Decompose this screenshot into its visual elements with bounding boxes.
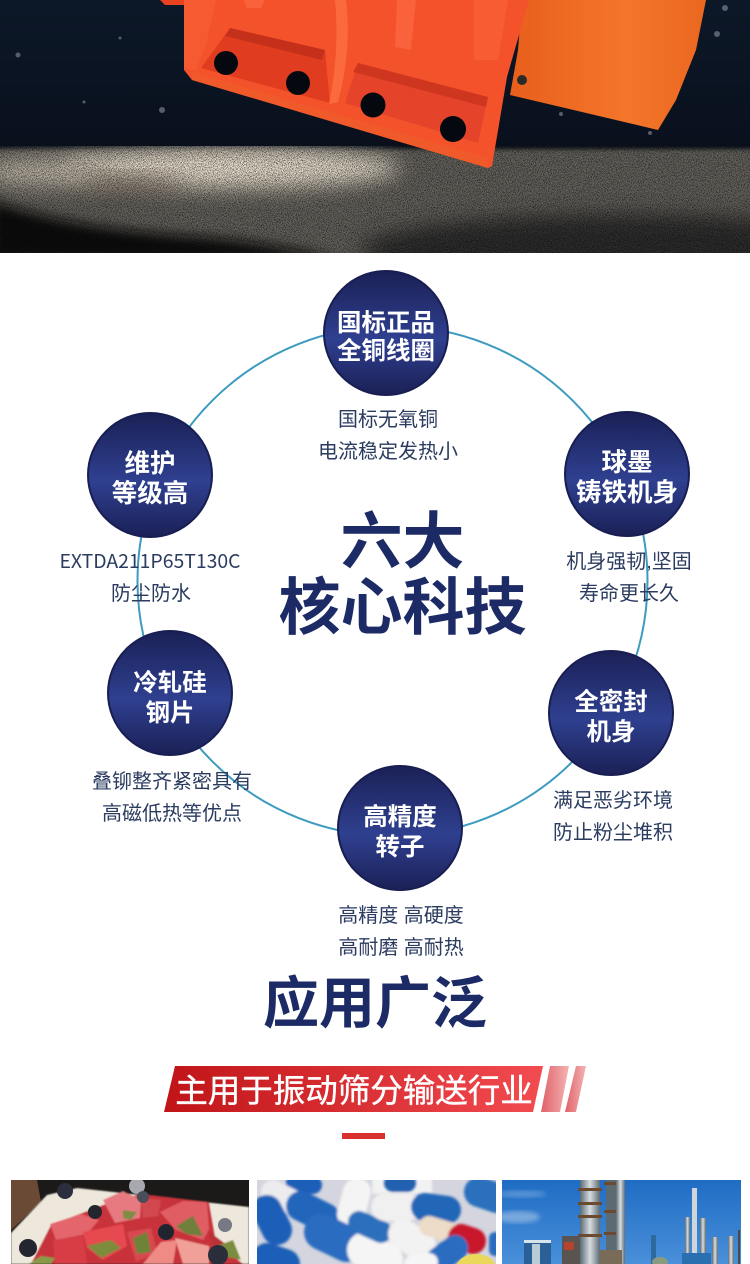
description: sealed body — [553, 790, 673, 844]
description: sealed body: 防止粉尘堆积 — [553, 822, 673, 844]
description: protection grade: 防尘防水 — [111, 583, 191, 605]
ring connecting the six features — [136, 331, 648, 831]
title: six core technologies — [278, 508, 526, 643]
feature: fully sealed body: 全密封 — [574, 689, 648, 716]
feature: ductile iron body: 球墨 — [601, 449, 652, 477]
description: rotor: 高精度 高硬度 — [338, 905, 464, 927]
description: copper coil: 电流稳定发热小 — [318, 441, 458, 463]
feature: protection grade: 维护 — [124, 450, 176, 478]
feature: fully sealed body — [548, 650, 674, 776]
feature: cold rolled silicon steel: 冷轧硅 — [133, 670, 207, 697]
description: silicon steel: 叠铆整齐紧密具有 — [92, 771, 252, 793]
feature: national standard copper coil — [323, 270, 449, 396]
description: sealed body: 满足恶劣环境 — [553, 790, 673, 812]
sand floor — [0, 146, 750, 253]
description: protection grade: EXTDA211P65T130C — [60, 545, 240, 574]
dust specks — [16, 5, 728, 135]
feature: high precision rotor: 转子 — [376, 834, 424, 861]
heading: wide application: 应用广泛 — [263, 972, 487, 1035]
feature: protection grade — [87, 412, 213, 538]
feature: ductile iron body — [564, 411, 690, 537]
photo: strawberries food industry — [11, 1180, 249, 1264]
photo: refinery chemical industry — [502, 1180, 741, 1264]
feature: protection grade: 等级高 — [112, 480, 188, 508]
description: copper coil — [318, 409, 458, 463]
feature: fully sealed body: 机身 — [586, 719, 636, 746]
photo: capsules pharmaceutical industry — [257, 1180, 496, 1264]
description: iron body — [566, 551, 692, 605]
motor cylinder — [510, 0, 706, 130]
description: iron body: 机身强韧,坚固 — [566, 551, 692, 573]
feature: national standard copper coil: 全铜线圈 — [337, 338, 435, 365]
banner shape with stripes — [164, 1066, 586, 1112]
description: copper coil: 国标无氧铜 — [338, 409, 438, 431]
feature: national standard copper coil: 国标正品 — [337, 310, 435, 337]
red dash — [342, 1133, 385, 1139]
title: six core technologies: 核心科技 — [278, 574, 526, 643]
description: rotor — [338, 905, 464, 959]
feature: high precision rotor: 高精度 — [363, 804, 437, 831]
title: six core technologies: 六大 — [340, 508, 464, 577]
description: silicon steel — [92, 770, 252, 825]
feature: cold rolled silicon steel: 钢片 — [146, 700, 194, 727]
description: iron body: 寿命更长久 — [579, 583, 679, 605]
description: protection grade — [60, 545, 240, 605]
banner text: main industries: 主用于振动筛分输送行业 — [175, 1073, 533, 1109]
motor bracket — [160, 0, 529, 168]
description: rotor: 高耐磨 高耐热 — [338, 937, 464, 959]
feature: ductile iron body: 铸铁机身 — [576, 479, 678, 507]
feature: high precision rotor — [337, 765, 463, 891]
description: silicon steel: 高磁低热等优点 — [102, 803, 242, 825]
feature: cold rolled silicon steel — [107, 630, 233, 756]
hero photo: vibration motor over sand — [0, 0, 750, 253]
